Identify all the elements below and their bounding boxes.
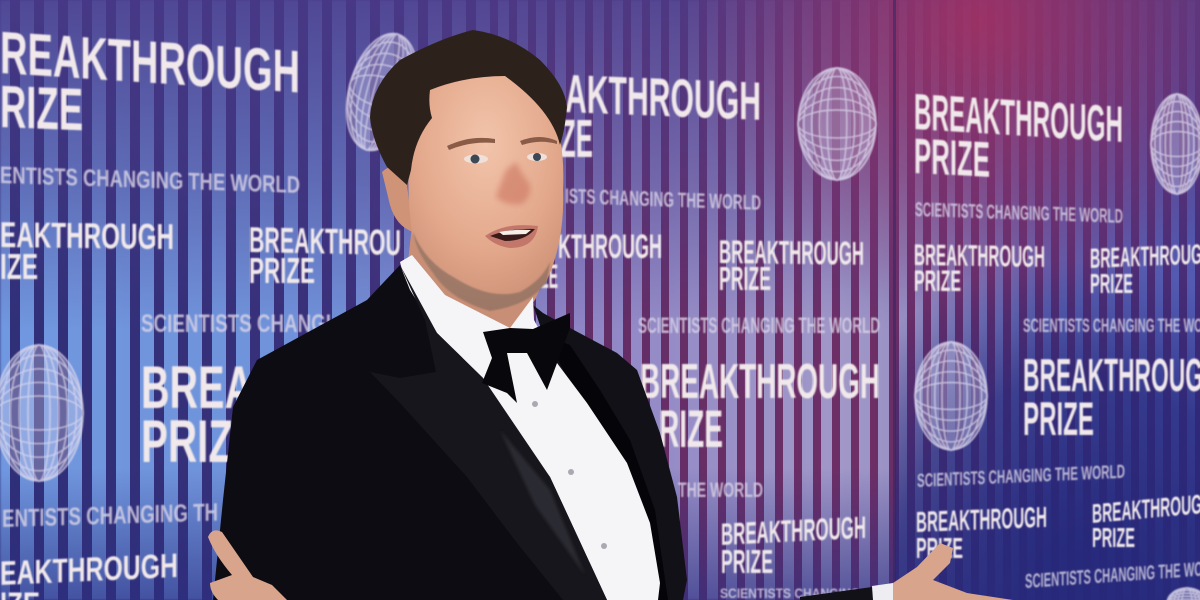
backdrop text: left column: ENTISTS CHANGING TH (2, 499, 218, 533)
backdrop text: left column: PRIZ (141, 408, 233, 475)
shirt front (400, 255, 660, 600)
backdrop text: centre column: BREAKTHROUGH (640, 355, 880, 409)
backdrop text: left column: REAKTHROUGH (0, 19, 300, 105)
backdrop text: left column: EAKTHROUGH (0, 547, 178, 593)
jacket right side (533, 305, 687, 600)
backdrop text: centre column: PRIZE (719, 260, 771, 297)
backdrop text: left column: BREA (141, 354, 253, 421)
backdrop text: right column: PRIZE (916, 533, 963, 565)
backdrop text: centre column: ZE (560, 109, 593, 169)
backdrop text: centre column: SCIENTISTS CHANGING THE WORLD (638, 313, 880, 338)
backdrop text: left column: SCIENTISTS CHANGI (141, 310, 331, 338)
lapel left (370, 265, 607, 600)
backdrop text: centre column: BREAKTHROUGH (721, 510, 866, 552)
backdrop text: left column: ENTISTS CHANGING THE WORLD (0, 162, 300, 199)
nose (496, 162, 530, 204)
backdrop text: right column: PRIZE (1090, 268, 1133, 299)
right hand (893, 543, 1013, 600)
backdrop text: centre column: AKTHROUGH (565, 64, 761, 132)
left hand (208, 530, 287, 600)
backdrop text: centre column: THE WORLD (678, 479, 763, 502)
stubble (413, 232, 550, 311)
backdrop text: centre column: ZE (540, 258, 558, 296)
hair (370, 30, 567, 185)
eyes (464, 154, 488, 164)
right sleeve (800, 587, 873, 600)
backdrop text: right column: PRIZE (1092, 522, 1135, 553)
backdrop text: centre column: KTHROUGH (558, 228, 662, 266)
backdrop text: left column: RIZE (0, 73, 83, 143)
backdrop text: right column: BREAKTHROUGH (916, 502, 1047, 539)
lapel right (545, 335, 668, 600)
tuxedo jacket (213, 265, 607, 600)
ear (382, 166, 413, 232)
bow tie (482, 313, 570, 403)
backdrop text: centre column: PRIZE (721, 543, 773, 580)
eyebrows (447, 138, 495, 150)
lapel highlight (500, 430, 585, 575)
backdrop text: left column: PRIZE (249, 250, 315, 291)
backdrop text: right column: PRIZE (1023, 392, 1094, 445)
backdrop text: left column: BREAKTHROU (249, 219, 401, 263)
backdrop text: centre column: BREAKTHROUGH (719, 233, 864, 272)
shirt studs (532, 401, 607, 549)
backdrop text: right column: PRIZE (914, 265, 961, 298)
backdrop text: centre column (540, 64, 880, 600)
right cuff (872, 583, 894, 600)
backdrop text: centre column: ISTS CHANGING THE WORLD (565, 185, 761, 215)
neck (408, 225, 548, 330)
mouth (485, 225, 538, 248)
backdrop text: right column (914, 83, 1200, 593)
figure: man in tuxedo (208, 30, 1013, 600)
backdrop text: left column: EAKTHROUGH (0, 214, 174, 257)
face (408, 73, 563, 310)
backdrop text: right column: PRIZE (914, 128, 990, 188)
backdrop text: left column (0, 19, 401, 600)
backdrop text: right column: BREAKTHROUGH (914, 239, 1045, 274)
backdrop text: centre column: RIZE (659, 400, 723, 459)
backdrop text: left column: IZE (0, 246, 38, 287)
